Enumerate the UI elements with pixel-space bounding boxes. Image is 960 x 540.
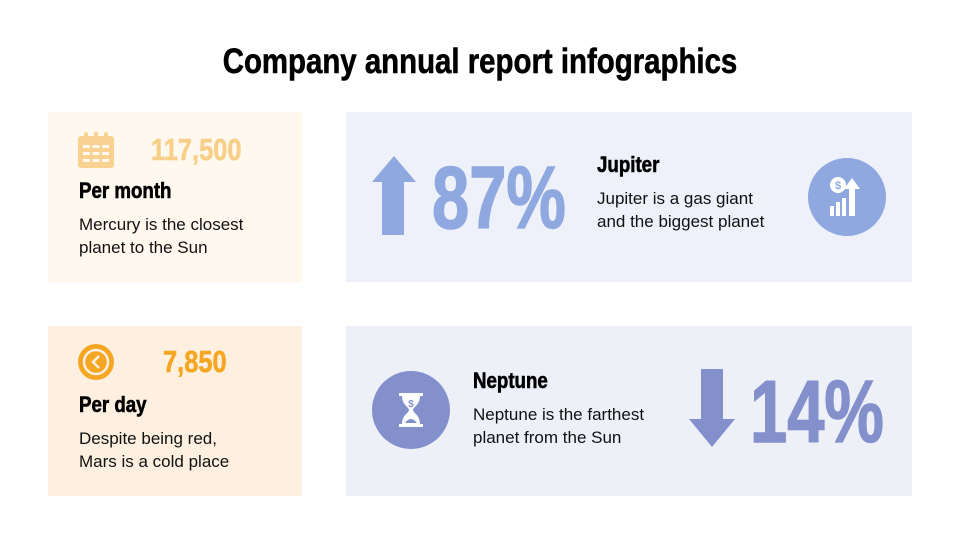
icon: hourglass	[372, 371, 450, 449]
heading: per month: Per month	[79, 178, 171, 203]
title: Company annual report infographics	[223, 42, 737, 81]
number: 7,850: 7,850	[163, 344, 227, 379]
heading: jupiter: Jupiter	[597, 152, 659, 177]
arrow down	[689, 369, 735, 447]
text	[473, 405, 644, 447]
text: Mercury is the closest	[79, 215, 243, 234]
number: 87%: 87%	[432, 148, 566, 247]
text: Mars is a cold place	[79, 452, 229, 471]
text	[79, 215, 244, 257]
panel: neptune	[346, 326, 912, 496]
text: Despite being red,	[79, 429, 217, 448]
panel: per day	[48, 326, 302, 496]
text	[79, 429, 229, 471]
heading: per day: Per day	[79, 392, 147, 417]
text: planet from the Sun	[473, 428, 621, 447]
arrow up	[372, 156, 416, 235]
text: Neptune is the farthest	[473, 405, 644, 424]
number: 14%: 14%	[750, 362, 884, 461]
text: and the biggest planet	[597, 212, 764, 231]
icon: calendar	[78, 132, 114, 168]
text: planet to the Sun	[79, 238, 208, 257]
icon: money growth: $	[835, 180, 841, 192]
icon: hourglass: $	[408, 399, 414, 410]
panel: per month	[48, 112, 302, 282]
icon: clock	[78, 344, 114, 380]
text	[597, 189, 764, 231]
heading: neptune: Neptune	[473, 368, 548, 393]
panel: jupiter	[346, 112, 912, 282]
text: Jupiter is a gas giant	[597, 189, 753, 208]
icon: money growth	[808, 158, 886, 236]
number: 117,500: 117,500	[151, 132, 241, 167]
